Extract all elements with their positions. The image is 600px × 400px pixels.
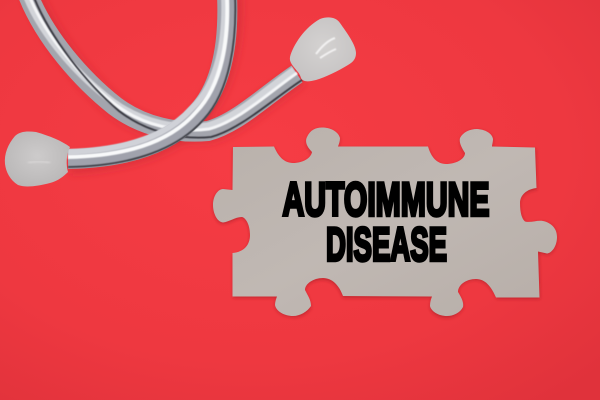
jigsaw pieces <box>213 128 557 318</box>
right ear tip <box>290 17 356 81</box>
puzzle label text <box>282 172 490 270</box>
puzzle body <box>213 128 557 316</box>
DISEASE: DISEASE <box>326 218 447 270</box>
puzzle shadow <box>213 129 557 318</box>
AUTOIMMUNE: AUTOIMMUNE <box>282 172 490 226</box>
tube shadows <box>32 0 300 164</box>
tube: top centre to left ear tip <box>68 0 235 167</box>
left ear tip <box>5 131 70 186</box>
tube: left arc to right ear tip <box>26 0 302 138</box>
stethoscope <box>5 0 356 186</box>
